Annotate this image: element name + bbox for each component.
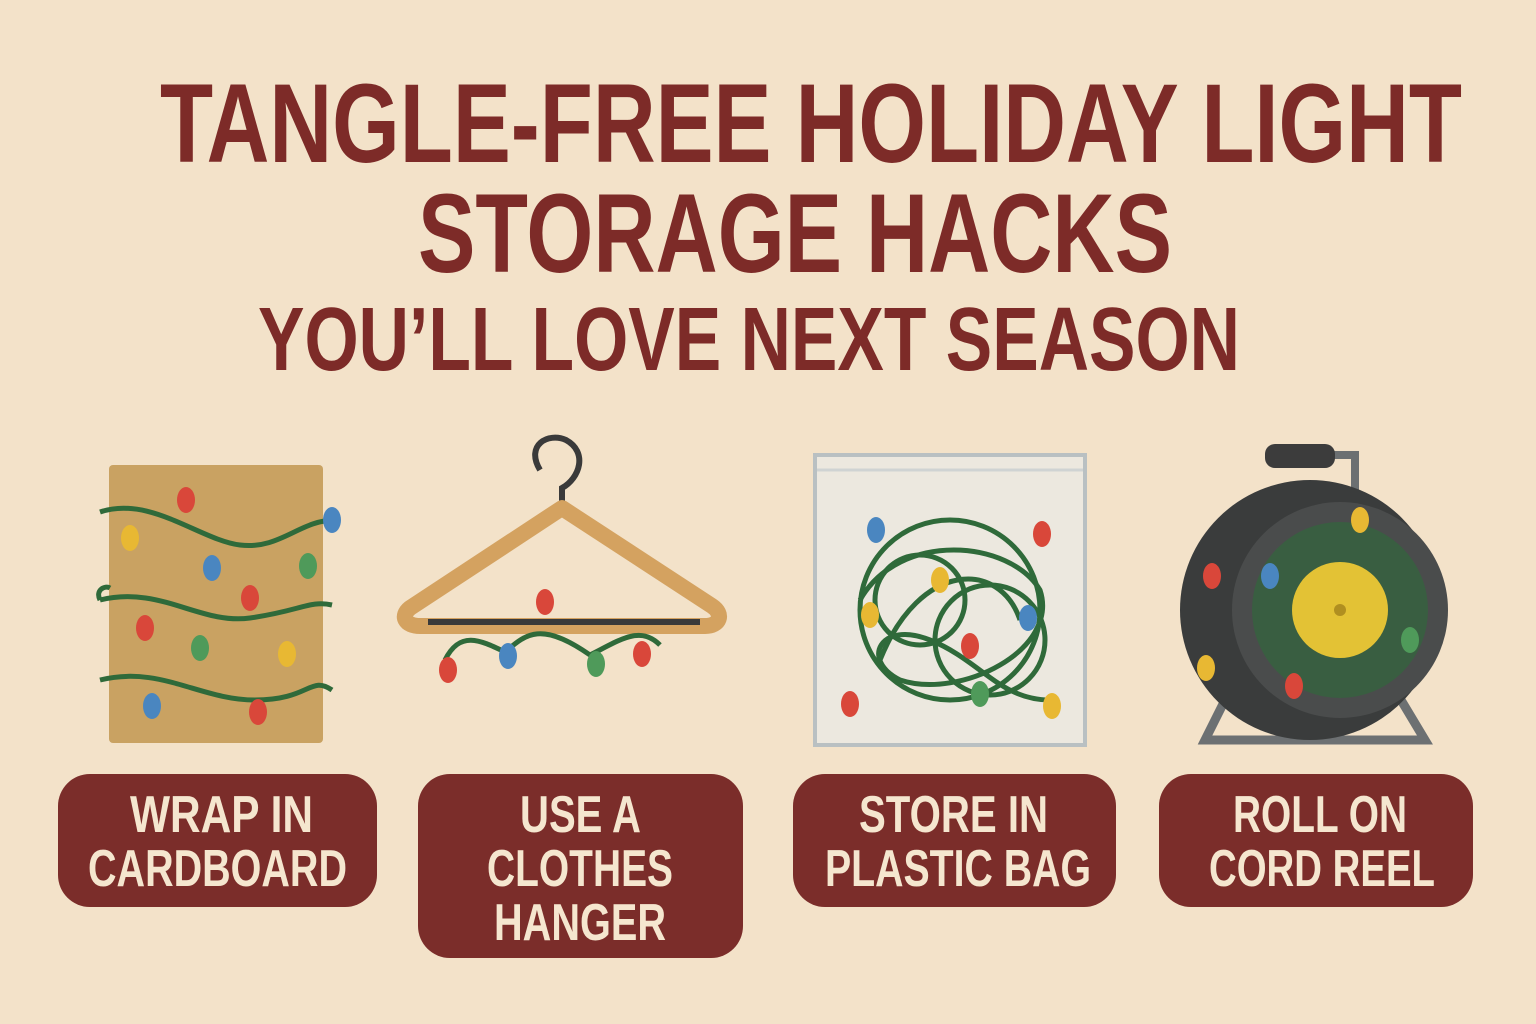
label: wrap in cardboard: WRAP IN xyxy=(130,786,313,844)
icon: cord reel xyxy=(1180,444,1448,740)
title: STORAGE HACKS xyxy=(418,171,1172,296)
icon: plastic bag xyxy=(815,455,1085,745)
label: roll on cord reel xyxy=(1159,774,1473,907)
title xyxy=(160,61,1462,390)
label: store in plastic bag: STORE IN xyxy=(859,786,1048,844)
label: wrap in cardboard xyxy=(58,774,377,907)
icon: cardboard with lights xyxy=(99,465,341,743)
label: wrap in cardboard: CARDBOARD xyxy=(88,840,347,898)
icon: clothes hanger xyxy=(405,438,719,683)
label: roll on cord reel: ROLL ON xyxy=(1233,786,1407,844)
title: YOU’LL LOVE NEXT SEASON xyxy=(258,290,1240,390)
label: use a clothes hanger: USE A xyxy=(520,786,641,844)
label: use a clothes hanger: HANGER xyxy=(494,894,666,952)
label: use a clothes hanger xyxy=(418,774,743,958)
label: store in plastic bag: PLASTIC BAG xyxy=(825,840,1091,898)
label: store in plastic bag xyxy=(793,774,1116,907)
label: use a clothes hanger: CLOTHES xyxy=(487,840,673,898)
label: roll on cord reel: CORD REEL xyxy=(1209,840,1435,898)
